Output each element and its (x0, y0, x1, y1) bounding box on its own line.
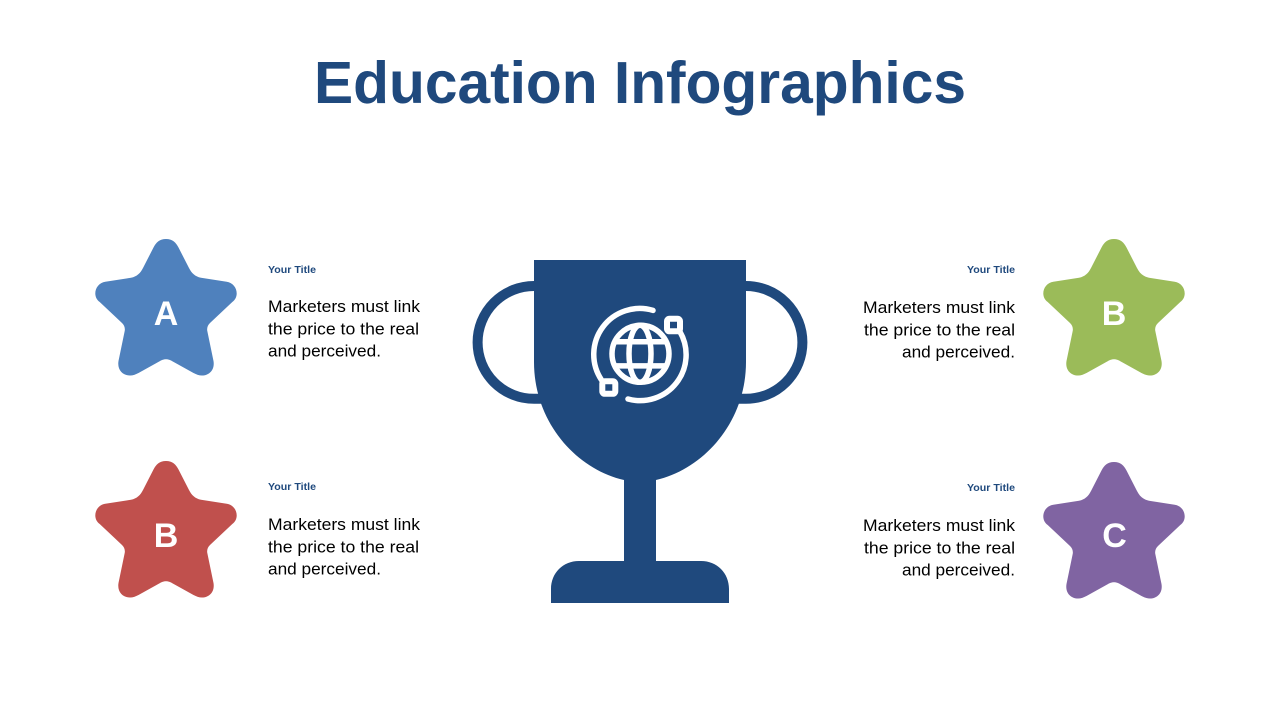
panel: B bottom left (95, 461, 421, 598)
text block: Marketers must link (863, 516, 1016, 535)
icon: globe with orbit (594, 308, 686, 401)
text block: and perceived. (268, 342, 381, 361)
text block: and perceived. (268, 560, 381, 579)
text block: the price to the real (268, 537, 419, 556)
text block: the price to the real (864, 538, 1015, 557)
text block: Marketers must link (268, 297, 421, 316)
trophy (478, 260, 802, 603)
heading: Your Title (967, 264, 1015, 276)
text block (268, 297, 421, 361)
star C (1043, 462, 1185, 598)
text block: Marketers must link (268, 515, 421, 534)
heading: Your Title (967, 482, 1015, 494)
text block: Marketers must link (863, 298, 1016, 317)
text block: the price to the real (268, 319, 419, 338)
trophy cup, stem and base (534, 260, 746, 603)
text block (268, 515, 421, 579)
trophy right handle (734, 286, 802, 399)
text block: the price to the real (864, 320, 1015, 339)
panel: A top left (95, 239, 421, 376)
text block (863, 516, 1016, 580)
text block: and perceived. (902, 343, 1015, 362)
star letter B: B (1102, 295, 1126, 333)
trophy left handle (478, 286, 546, 399)
star letter B: B (154, 517, 178, 555)
star letter A: A (154, 295, 178, 333)
text block (863, 298, 1016, 362)
star letter C: C (1102, 517, 1127, 555)
heading: Your Title (268, 481, 316, 493)
star A (95, 239, 237, 376)
star B red (95, 461, 237, 598)
heading: Your Title (268, 264, 316, 276)
star B green (1043, 239, 1185, 376)
title: Education Infographics (314, 50, 966, 116)
panel: C bottom right (863, 462, 1185, 598)
panel: B top right (863, 239, 1185, 376)
text block: and perceived. (902, 561, 1015, 580)
